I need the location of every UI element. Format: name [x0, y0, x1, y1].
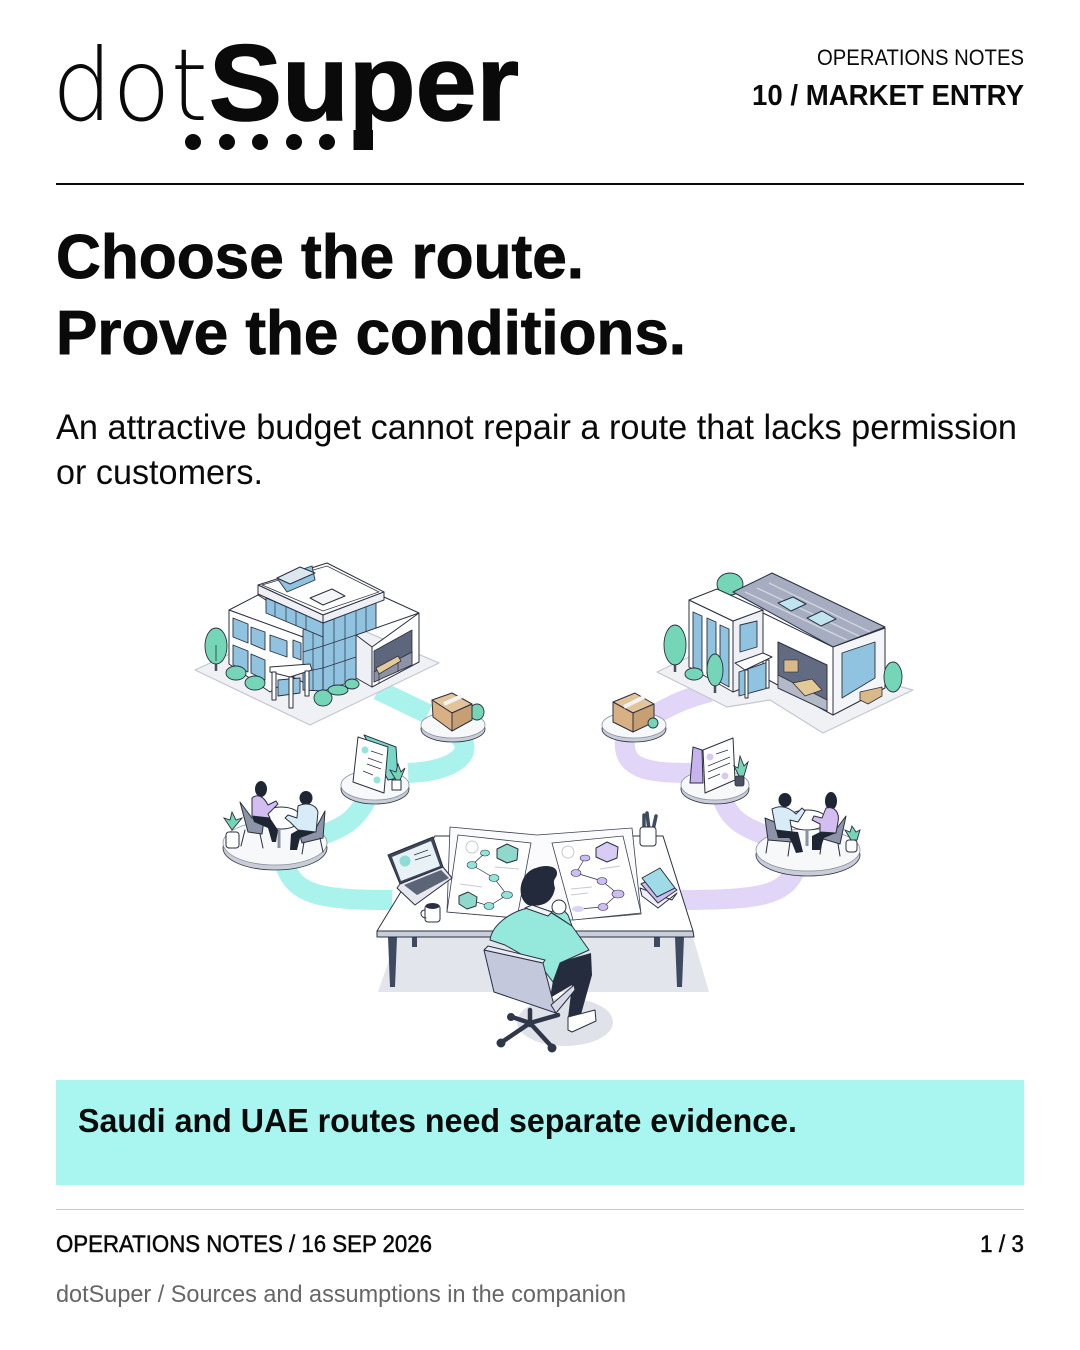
trees: right warehouse	[664, 625, 902, 693]
trees and shrubs: left office	[205, 628, 359, 706]
title: Prove the conditions.	[56, 299, 686, 368]
stop: left meeting	[223, 781, 327, 870]
logo: dotSuper: dot	[52, 27, 208, 144]
callout: Saudi and UAE routes need separate evidence.	[78, 1102, 797, 1139]
stop: left parcel	[421, 693, 485, 742]
stop: right parcel	[602, 693, 666, 742]
coffee mug	[421, 903, 440, 922]
logo: dotSuper	[52, 22, 519, 150]
footer: 1 / 3	[980, 1231, 1024, 1258]
series label: OPERATIONS NOTES	[817, 45, 1024, 70]
subtitle: or customers.	[56, 453, 263, 492]
subtitle	[56, 408, 1017, 492]
series label	[752, 45, 1024, 112]
title	[56, 223, 686, 368]
footer: dotSuper / Sources and assumptions in the companion	[56, 1281, 626, 1308]
person at desk	[484, 866, 613, 1052]
desk	[377, 836, 709, 992]
stop: right documents	[681, 738, 749, 804]
illustration: market entry routes	[195, 563, 913, 1052]
route maps on desk	[447, 827, 641, 920]
stop: right meeting	[756, 792, 860, 876]
callout	[56, 1080, 1024, 1185]
footer	[56, 1231, 1024, 1308]
pen cup	[640, 813, 656, 846]
stop: left documents	[341, 735, 409, 804]
building: right warehouse	[657, 573, 913, 733]
book stack	[640, 868, 677, 908]
logo: dotSuper: Super	[209, 22, 519, 143]
title: Choose the route.	[56, 223, 584, 292]
series label: 10 / MARKET ENTRY	[752, 80, 1024, 112]
footer: OPERATIONS NOTES / 16 SEP 2026	[56, 1231, 432, 1258]
subtitle: An attractive budget cannot repair a route that lacks permission	[56, 408, 1017, 447]
building: left office	[195, 563, 439, 725]
purple route lines	[625, 692, 795, 900]
teal route lines	[285, 690, 465, 900]
laptop	[388, 837, 452, 905]
